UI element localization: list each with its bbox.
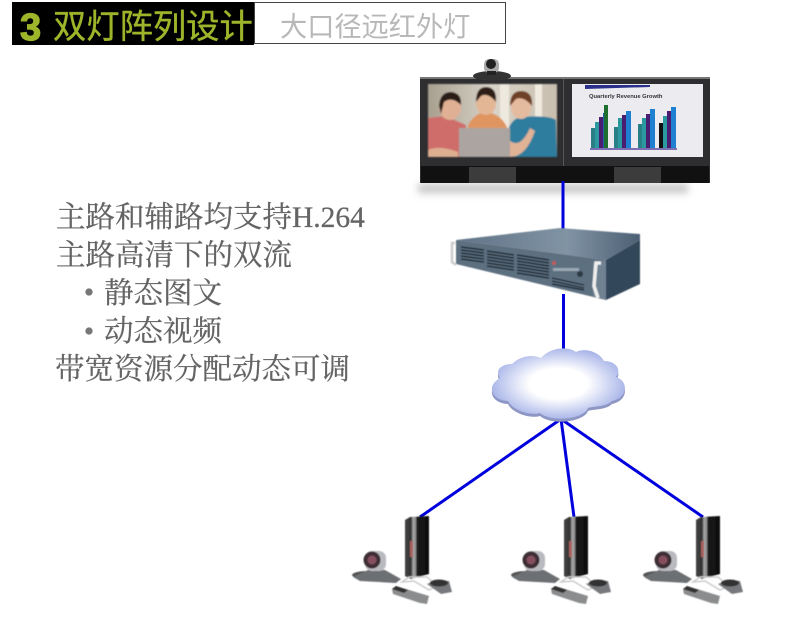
laptop [459, 128, 510, 157]
line 5: 带宽资源分配动态可调 [55, 353, 350, 386]
dual display unit [418, 59, 710, 193]
line 2: 主路高清下的双流 [56, 239, 292, 272]
bullet item: static: 静态图文 [104, 277, 222, 310]
logo light [552, 261, 556, 265]
server front [456, 240, 606, 300]
front vents [461, 247, 584, 290]
title: black section [12, 2, 254, 45]
line 1: 主路和辅路均支持H.264 [56, 201, 365, 234]
display shadow [418, 184, 688, 193]
MCU server [452, 228, 640, 300]
handles [452, 243, 456, 265]
chart bars [590, 105, 677, 150]
slide header strip [585, 85, 650, 89]
feature list text [55, 201, 365, 386]
right screen: revenue chart slide [572, 84, 703, 157]
person right [508, 116, 557, 157]
endpoint 2 [511, 516, 611, 604]
slide title: Quarterly Revenue Growth [589, 94, 663, 100]
network cloud [492, 348, 625, 422]
server side [606, 240, 640, 300]
subtitle box [254, 2, 506, 44]
connection lines [420, 181, 703, 517]
title bar [12, 2, 506, 49]
title number: 3 [20, 7, 41, 49]
person centre [468, 112, 507, 135]
camera [473, 59, 511, 81]
display frame [420, 77, 710, 183]
control panel [553, 268, 579, 271]
endpoint 1 [352, 516, 452, 604]
subtitle text: 大口径远红外灯 [280, 11, 470, 42]
title heading: 双灯阵列设计 [53, 9, 253, 46]
endpoint 3 [643, 516, 743, 604]
person left [428, 116, 466, 157]
left screen: video participants [428, 84, 557, 157]
server top [456, 228, 640, 260]
speaker bar [421, 166, 709, 183]
bullet item: dynamic: 动态视频 [104, 315, 223, 348]
